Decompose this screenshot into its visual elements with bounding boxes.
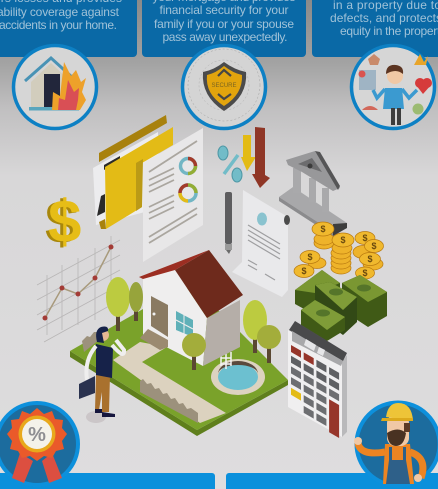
gold coin stacks: $ [301,266,307,276]
gold coin stacks: $ [371,241,377,251]
report with donut charts [143,128,203,262]
gold coin stacks [294,222,384,279]
gold coin stacks: $ [320,224,326,234]
contract document [232,190,290,297]
top panel: home insurance [0,0,137,57]
garden path [113,342,226,423]
line chart on grid [37,236,120,342]
pool [211,351,265,395]
fences [82,332,198,423]
top panel: life insurance: pass away unexpectedly. [162,30,288,44]
man with briefcase [79,326,124,423]
calculator [288,321,347,438]
icon: pen [225,192,232,254]
stacks of banknotes [295,270,387,341]
arrow: red down [252,127,270,188]
bottom panel: right [226,473,438,489]
gold coin stacks: $ [362,233,368,243]
icon: discount rosette badge [0,403,78,485]
folder with documents [93,115,173,229]
icon: construction worker [354,402,438,486]
icon: house on fire [14,46,96,128]
arrow: yellow down [241,135,256,171]
gold coin stacks: $ [362,268,368,278]
bottom panel: left [0,473,215,489]
top panel: life insurance: family if you or your spouse [154,17,294,31]
top panel: life insurance [142,0,306,57]
icon: secure shield: SECURE [211,83,237,89]
icon: bank building [279,151,347,236]
top panel: home insurance: accidents in your home. [0,18,117,32]
house [139,250,243,366]
icon: discount rosette badge: % [28,424,46,446]
icon: dollar sign: $ [48,188,81,255]
top panel: life insurance: financial security for your [160,3,288,17]
trees [106,277,281,370]
lawn base [70,285,288,436]
gold coin stacks: $ [307,252,313,262]
gold coin stacks: $ [340,235,346,245]
top panel: home insurance: ability coverage against [0,5,120,19]
icon: dollar sign: $ [45,189,78,256]
icon: percent sign [218,146,242,182]
gold coin stacks: $ [367,254,373,264]
top panel: title insurance [312,0,438,57]
house on green lot [70,250,288,436]
icon: person with risks [352,46,434,128]
icon: secure shield [182,46,266,128]
